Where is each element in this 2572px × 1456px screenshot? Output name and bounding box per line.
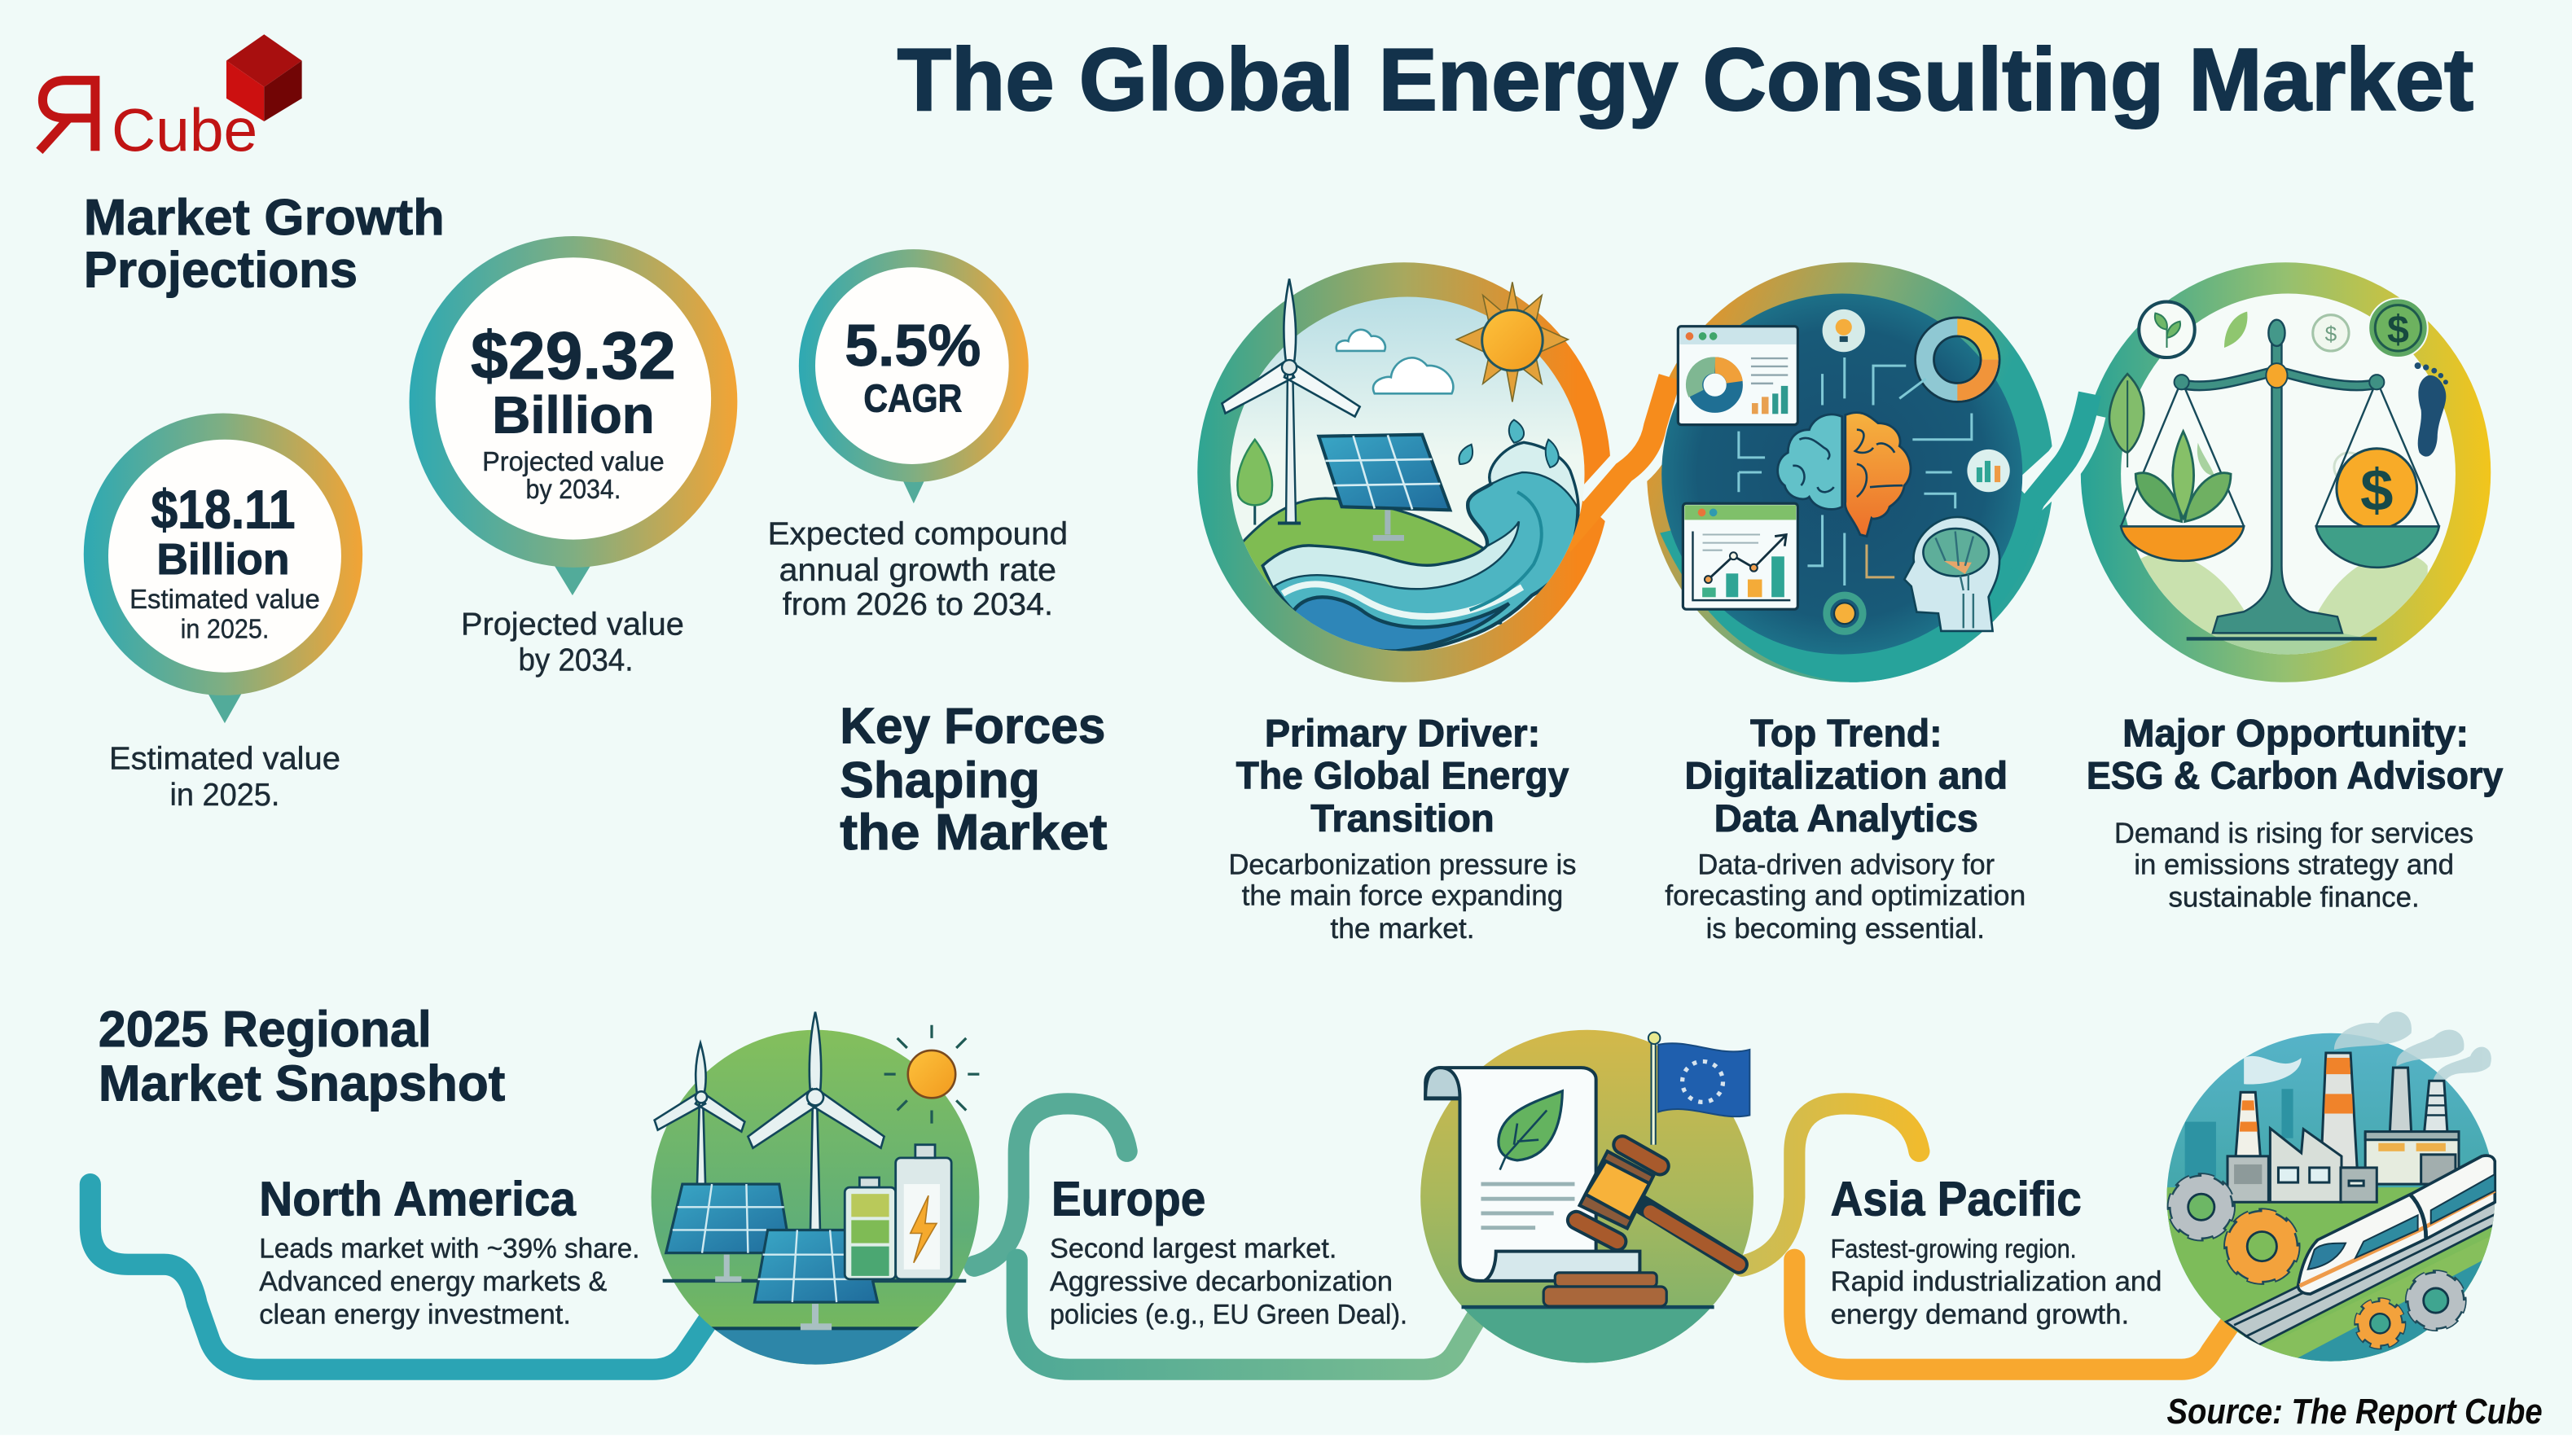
bubble: $18.11 billion: Billion (156, 536, 290, 584)
smoke (2334, 1011, 2491, 1082)
batteries (845, 1145, 951, 1279)
chart window (1683, 503, 1797, 609)
leaf (1499, 1091, 1562, 1170)
solar panels (666, 1184, 878, 1327)
sound block (1543, 1273, 1666, 1306)
factory buildings (2227, 1129, 2459, 1202)
text block: top trend: forecasting and optimization (1665, 880, 2026, 912)
bubble: $18.11 billion: $18.11 (151, 480, 296, 540)
bubble: 5.5% CAGR: 5.5% (845, 313, 981, 379)
scroll document (1425, 1068, 1639, 1281)
heading: market growth (84, 189, 445, 298)
wind turbine (1222, 278, 1360, 523)
top icons: $ (2387, 308, 2409, 352)
caption: projected value: by 2034. (518, 642, 633, 678)
chimneys (2236, 1053, 2447, 1168)
bubble: 5.5% CAGR: CAGR (863, 377, 962, 421)
text block: primary driver: the market. (1330, 913, 1475, 945)
heading: regional snapshot: 2025 Regional (99, 1001, 432, 1058)
connector: teal band (2004, 393, 2090, 566)
caption: projected value (461, 606, 684, 678)
brain (1778, 413, 1911, 537)
dashboard window (1678, 327, 1797, 425)
region text: Europe: Aggressive decarbonization (1050, 1266, 1393, 1297)
text block: major opportunity: in emissions strategy and (2134, 849, 2454, 880)
logo wordmark (39, 81, 257, 164)
text block: primary driver: The Global Energy (1236, 755, 1569, 798)
scale stand (2175, 320, 2384, 638)
caption: CAGR: from 2026 to 2034. (783, 586, 1053, 622)
heading: regional snapshot (99, 1001, 506, 1112)
bubble: $18.11 billion (84, 414, 362, 723)
heading: key forces: the Market (840, 804, 1108, 861)
region text: Europe (1050, 1171, 1407, 1330)
text block: primary driver: Primary Driver: (1265, 712, 1540, 755)
text block: top trend: Data-driven advisory for (1698, 849, 1995, 880)
bubble: 5.5% CAGR (799, 249, 1029, 503)
circle: energy transition illustration (1222, 278, 1585, 656)
circle: Europe illustration (1420, 1030, 1755, 1366)
coin (2337, 449, 2417, 529)
bubble: $29.32 billion (410, 236, 737, 595)
region text: North America: North America (259, 1171, 577, 1226)
icon: red cube (226, 34, 302, 121)
region text: Asia Pacific: Rapid industrialization and (1831, 1266, 2162, 1297)
region text: Asia Pacific (1831, 1171, 2162, 1330)
region text: Asia Pacific: Fastest-growing region. (1831, 1235, 2077, 1264)
plant (2135, 432, 2231, 521)
heading: market growth: Projections (84, 241, 358, 298)
head silhouette (1904, 517, 1999, 631)
text block: primary driver: Decarbonization pressure is (1229, 849, 1576, 880)
title: The Global Energy Consulting Market (898, 31, 2473, 129)
big donut chart (1925, 327, 1990, 393)
path: Europe connector (974, 1103, 1485, 1370)
rings and connector bands of the three force circles (1197, 262, 2491, 682)
heading: key forces (840, 697, 1108, 861)
connector: orange band (1561, 377, 1670, 545)
text block: primary driver: the main force expanding (1242, 880, 1563, 912)
small icons and circuit lines (1739, 309, 2010, 631)
circle: digitalization and data analytics illustration (1661, 294, 2022, 655)
text block: top trend (1665, 712, 2026, 945)
text block: primary driver: Transition (1310, 797, 1494, 840)
pans (2121, 526, 2439, 568)
text block: major opportunity: sustainable finance. (2169, 882, 2420, 914)
region text: North America: Leads market with ~39% share. (259, 1234, 639, 1265)
text block: major opportunity: ESG & Carbon Advisory (2087, 755, 2504, 798)
path: Asia Pacific connector (1742, 1103, 2241, 1370)
region text: Asia Pacific: energy demand growth. (1831, 1299, 2129, 1330)
bubble: $29.32 billion: Billion (492, 386, 655, 445)
clouds (1336, 330, 1453, 393)
text block: major opportunity: Demand is rising for services (2114, 818, 2473, 849)
text block: major opportunity: Major Opportunity: (2122, 712, 2469, 755)
path: North America connector (90, 1184, 725, 1370)
region text: Europe: Europe (1051, 1171, 1205, 1226)
region text: North America: clean energy investment. (259, 1299, 571, 1330)
bubble: $18.11 billion: Estimated value (129, 585, 320, 615)
sun (1456, 282, 1568, 401)
bubble: $29.32 billion: $29.32 (471, 318, 676, 393)
caption: estimated value (109, 741, 340, 813)
heading: key forces: Shaping (840, 752, 1040, 809)
bullet train (2298, 1156, 2495, 1294)
sun (884, 1025, 979, 1124)
text block: primary driver (1229, 712, 1576, 945)
wave (1263, 443, 1578, 651)
caption: estimated value: Estimated value (109, 741, 340, 777)
caption: projected value: Projected value (461, 606, 684, 642)
gears (2172, 1178, 2462, 1346)
circle: ESG and carbon advisory illustration (2109, 294, 2456, 656)
caption: CAGR: Expected compound (768, 516, 1068, 552)
heading: market growth: Market Growth (84, 189, 445, 246)
caption: estimated value: in 2025. (169, 777, 279, 813)
top icons (2109, 299, 2448, 482)
EU flag (1648, 1033, 1749, 1145)
heading: key forces: Key Forces (840, 697, 1105, 754)
region text: North America: Advanced energy markets & (259, 1266, 607, 1297)
logo wordmark: Cube (112, 96, 257, 164)
region text: Asia Pacific: Asia Pacific (1831, 1171, 2082, 1226)
caption: CAGR: annual growth rate (779, 552, 1056, 588)
bubble: $29.32 billion: by 2034. (526, 475, 621, 505)
region text: Europe: policies (e.g., EU Green Deal). (1050, 1299, 1407, 1330)
heading: regional snapshot: Market Snapshot (99, 1055, 506, 1112)
text block: top trend: Top Trend: (1750, 712, 1942, 755)
gavel (1576, 1145, 1739, 1265)
text block: top trend: Digitalization and (1684, 755, 2008, 798)
circle: North America illustration (648, 1012, 982, 1368)
chains (2121, 380, 2439, 526)
bubble: $29.32 billion: Projected value (482, 447, 665, 477)
top icons: $ (2325, 322, 2337, 346)
text block: top trend: is becoming essential. (1706, 913, 1985, 945)
text block: top trend: Data Analytics (1714, 797, 1978, 840)
bubble: $18.11 billion: in 2025. (181, 614, 269, 644)
tree (1237, 440, 1272, 524)
water drops (1459, 420, 1559, 467)
wind turbines (655, 1012, 884, 1234)
logo: RCube (39, 34, 302, 164)
text block: major opportunity (2087, 712, 2504, 914)
hills (2132, 554, 2428, 656)
solar panel (1319, 435, 1450, 538)
coin: $ (2360, 457, 2393, 523)
region text: Europe: Second largest market. (1050, 1234, 1336, 1265)
region text: North America (259, 1171, 639, 1330)
caption: CAGR (768, 516, 1068, 622)
circle: Asia Pacific illustration (2165, 1011, 2496, 1378)
